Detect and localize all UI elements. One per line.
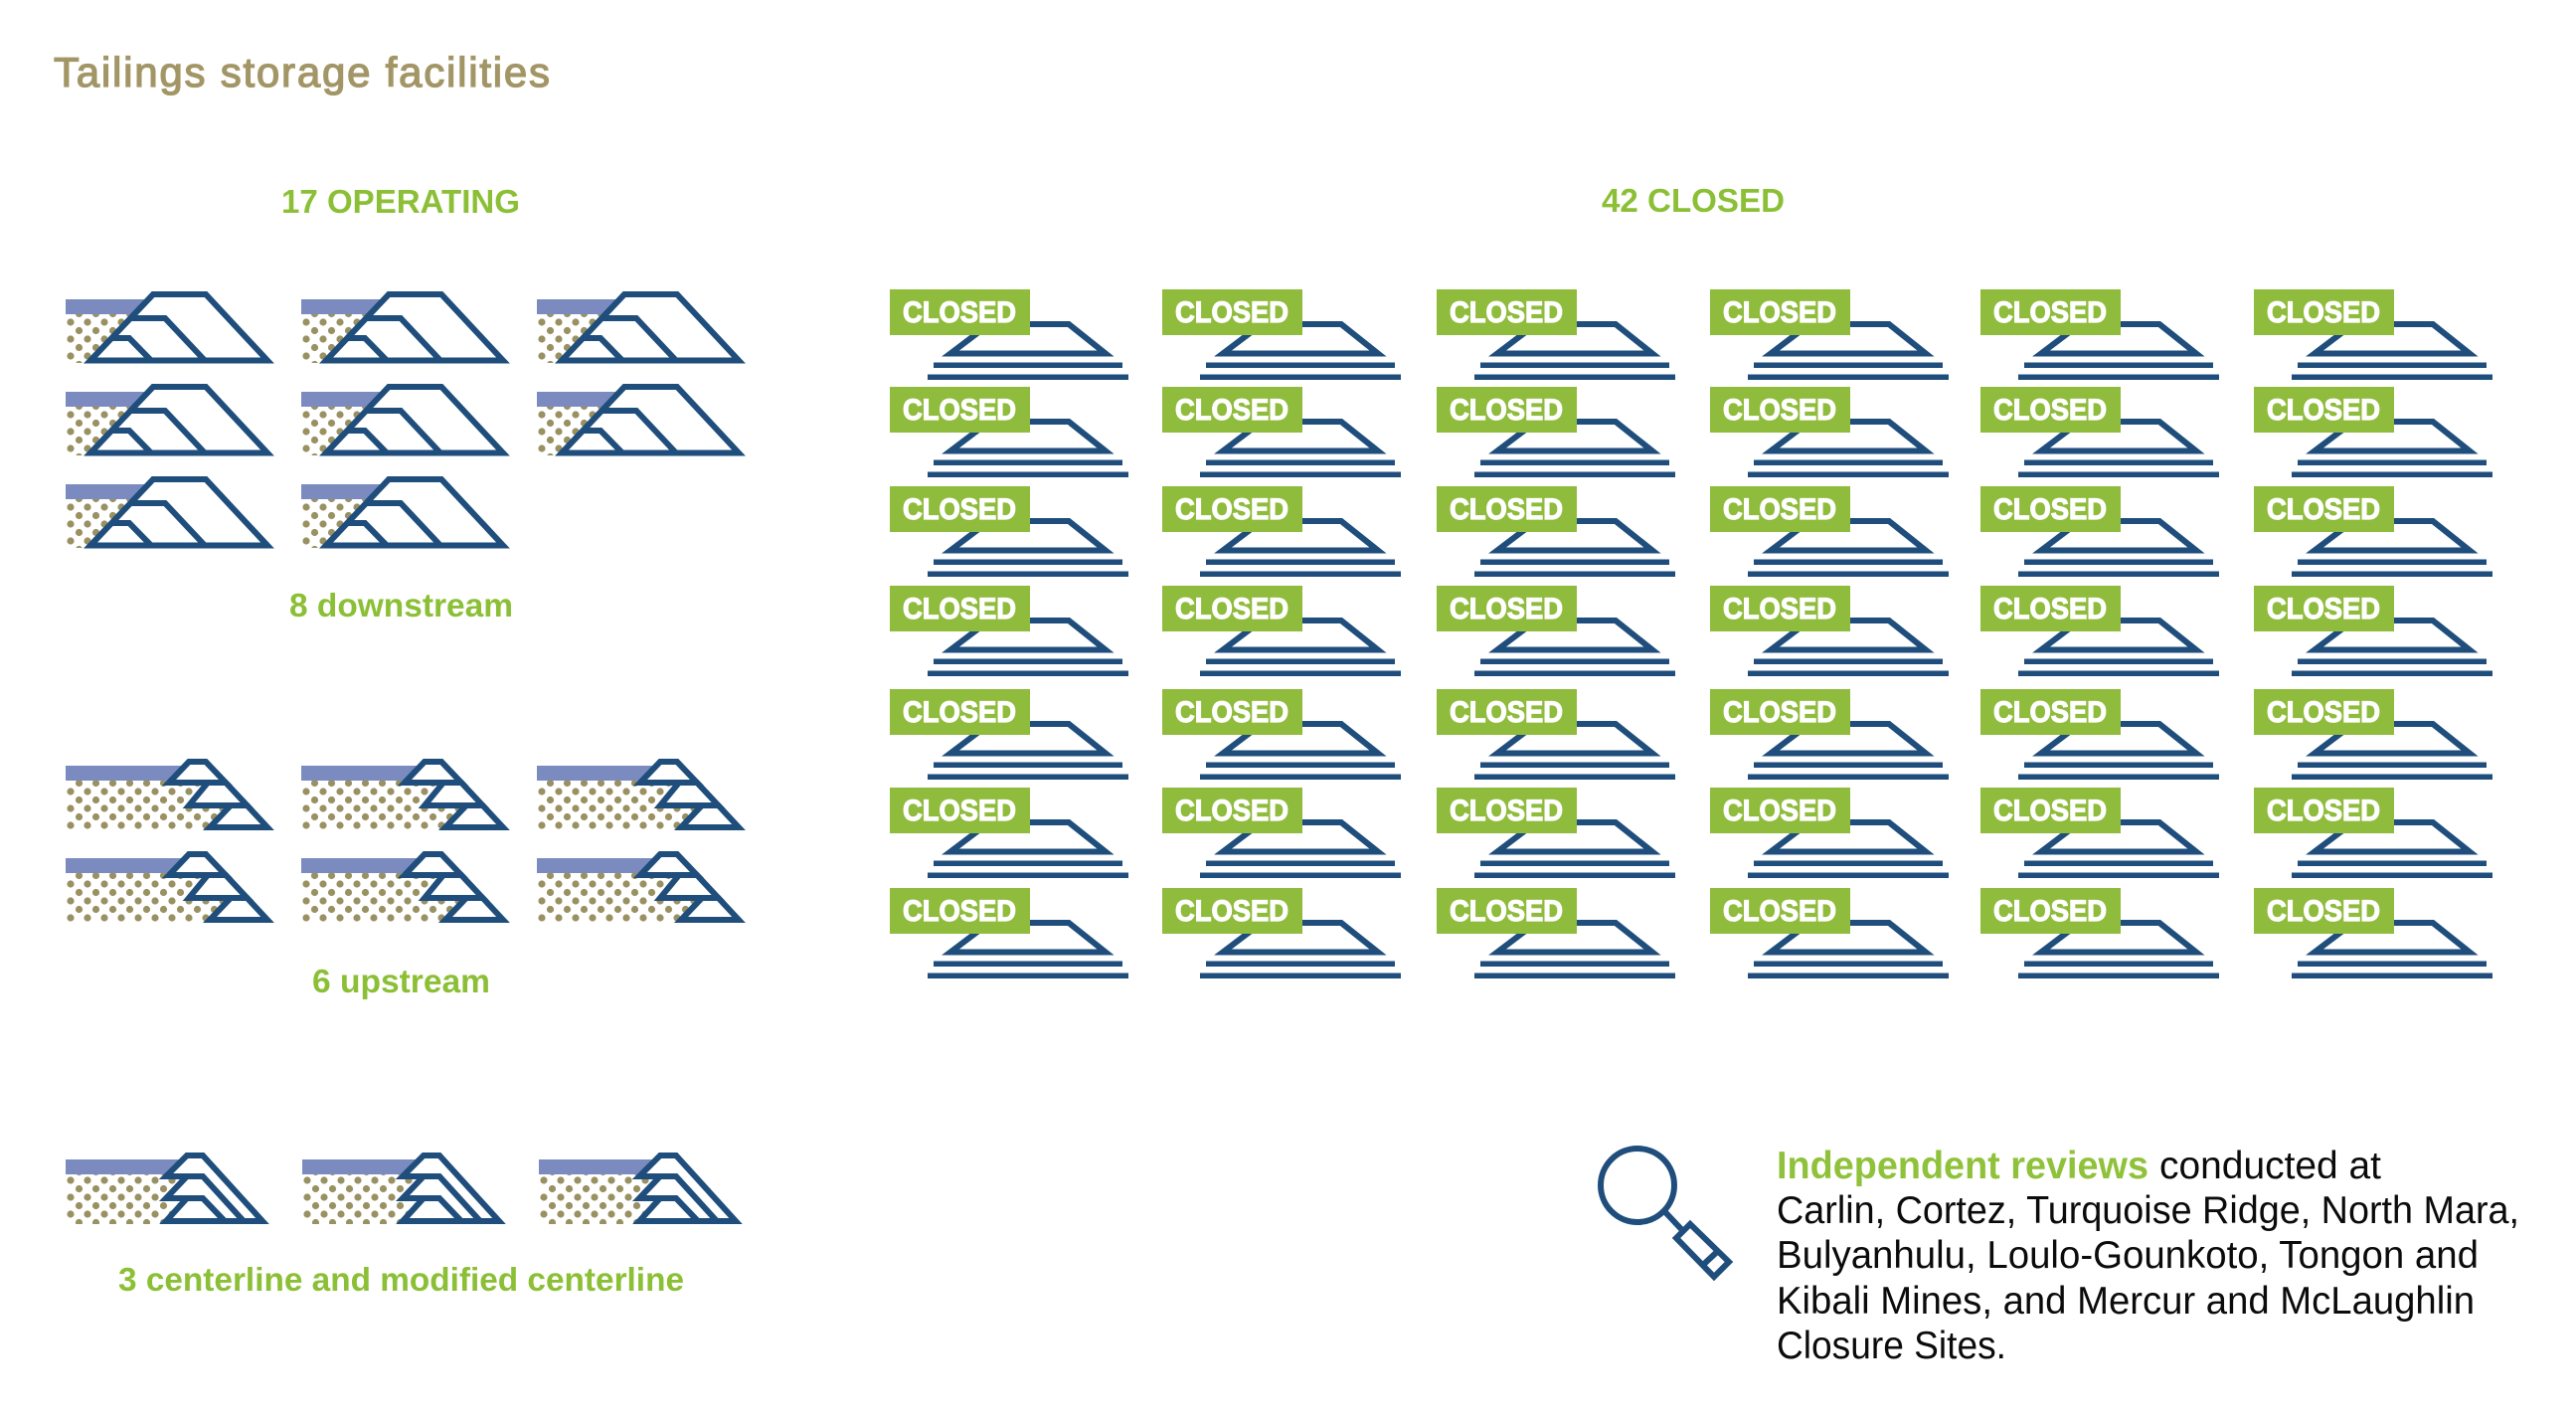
icon grid: 42 closed facilities: CLOSED	[1450, 296, 1563, 329]
icon grid: 42 closed facilities: CLOSED	[903, 493, 1016, 526]
icon grid: 42 closed facilities: CLOSED	[1993, 394, 2107, 427]
icon grid: 42 closed facilities: CLOSED	[1450, 696, 1563, 729]
callout: independent reviews: Independent reviews	[1777, 1145, 2148, 1187]
label: 3 centerline and modified centerline: 3 centerline and modified centerline	[118, 1261, 684, 1298]
icon grid: 42 closed facilities: CLOSED	[1175, 895, 1288, 928]
heading: 17 operating: 17 OPERATING	[281, 183, 520, 220]
icon grid: 42 closed facilities: CLOSED	[2267, 394, 2380, 427]
icon group: 8 downstream dams	[66, 294, 739, 548]
label: 6 upstream: 6 upstream	[312, 963, 490, 999]
icon grid: 42 closed facilities: CLOSED	[2267, 593, 2380, 625]
icon grid: 42 closed facilities: CLOSED	[903, 593, 1016, 625]
icon grid: 42 closed facilities: CLOSED	[1175, 296, 1288, 329]
icon grid: 42 closed facilities: CLOSED	[1175, 394, 1288, 427]
icon grid: 42 closed facilities: CLOSED	[1993, 593, 2107, 625]
icon grid: 42 closed facilities: CLOSED	[903, 795, 1016, 827]
icon group: 3 centerline dams	[66, 1155, 736, 1224]
icon grid: 42 closed facilities: CLOSED	[1993, 696, 2107, 729]
icon grid: 42 closed facilities: CLOSED	[1723, 895, 1836, 928]
callout: independent reviews: Carlin, Cortez, Turquoise Ridge, North Mara,	[1777, 1189, 2519, 1232]
icon grid: 42 closed facilities: CLOSED	[2267, 895, 2380, 928]
icon grid: 42 closed facilities: CLOSED	[1175, 493, 1288, 526]
icon grid: 42 closed facilities: CLOSED	[1450, 795, 1563, 827]
icon: magnifying glass	[1601, 1149, 1729, 1277]
callout: independent reviews: Closure Sites.	[1777, 1325, 2006, 1367]
icon grid: 42 closed facilities: CLOSED	[1993, 493, 2107, 526]
icon grid: 42 closed facilities	[890, 289, 2492, 978]
icon grid: 42 closed facilities: CLOSED	[2267, 795, 2380, 827]
icon group: 6 upstream dams	[66, 762, 739, 922]
icon grid: 42 closed facilities: CLOSED	[2267, 696, 2380, 729]
icon grid: 42 closed facilities: CLOSED	[1175, 696, 1288, 729]
icon grid: 42 closed facilities: CLOSED	[1723, 593, 1836, 625]
icon grid: 42 closed facilities: CLOSED	[2267, 493, 2380, 526]
callout: independent reviews	[1777, 1145, 2519, 1367]
icon grid: 42 closed facilities: CLOSED	[1450, 493, 1563, 526]
icon grid: 42 closed facilities: CLOSED	[1993, 296, 2107, 329]
icon grid: 42 closed facilities: CLOSED	[1723, 493, 1836, 526]
icon grid: 42 closed facilities: CLOSED	[1993, 895, 2107, 928]
icon grid: 42 closed facilities: CLOSED	[1723, 296, 1836, 329]
icon grid: 42 closed facilities: CLOSED	[1175, 593, 1288, 625]
callout: independent reviews: Bulyanhulu, Loulo-Gounkoto, Tongon and	[1777, 1234, 2479, 1277]
icon grid: 42 closed facilities: CLOSED	[1175, 795, 1288, 827]
panel: operating facilities	[66, 183, 739, 1298]
icon grid: 42 closed facilities: CLOSED	[1723, 394, 1836, 427]
icon grid: 42 closed facilities: CLOSED	[1450, 394, 1563, 427]
icon grid: 42 closed facilities: CLOSED	[1993, 795, 2107, 827]
icon grid: 42 closed facilities: CLOSED	[1450, 593, 1563, 625]
icon grid: 42 closed facilities: CLOSED	[1723, 795, 1836, 827]
label: 8 downstream: 8 downstream	[289, 587, 513, 623]
panel: closed facilities	[890, 182, 2492, 978]
icon grid: 42 closed facilities: CLOSED	[1450, 895, 1563, 928]
icon grid: 42 closed facilities: CLOSED	[2267, 296, 2380, 329]
icon grid: 42 closed facilities: CLOSED	[903, 895, 1016, 928]
icon grid: 42 closed facilities: CLOSED	[903, 696, 1016, 729]
icon grid: 42 closed facilities: CLOSED	[903, 296, 1016, 329]
callout: independent reviews: conducted at	[2159, 1145, 2381, 1187]
title: Tailings storage facilities	[54, 49, 550, 95]
heading: 42 closed: 42 CLOSED	[1602, 182, 1785, 219]
icon grid: 42 closed facilities: CLOSED	[1723, 696, 1836, 729]
callout: independent reviews: Kibali Mines, and Mercur and McLaughlin	[1777, 1280, 2475, 1323]
icon grid: 42 closed facilities: CLOSED	[903, 394, 1016, 427]
